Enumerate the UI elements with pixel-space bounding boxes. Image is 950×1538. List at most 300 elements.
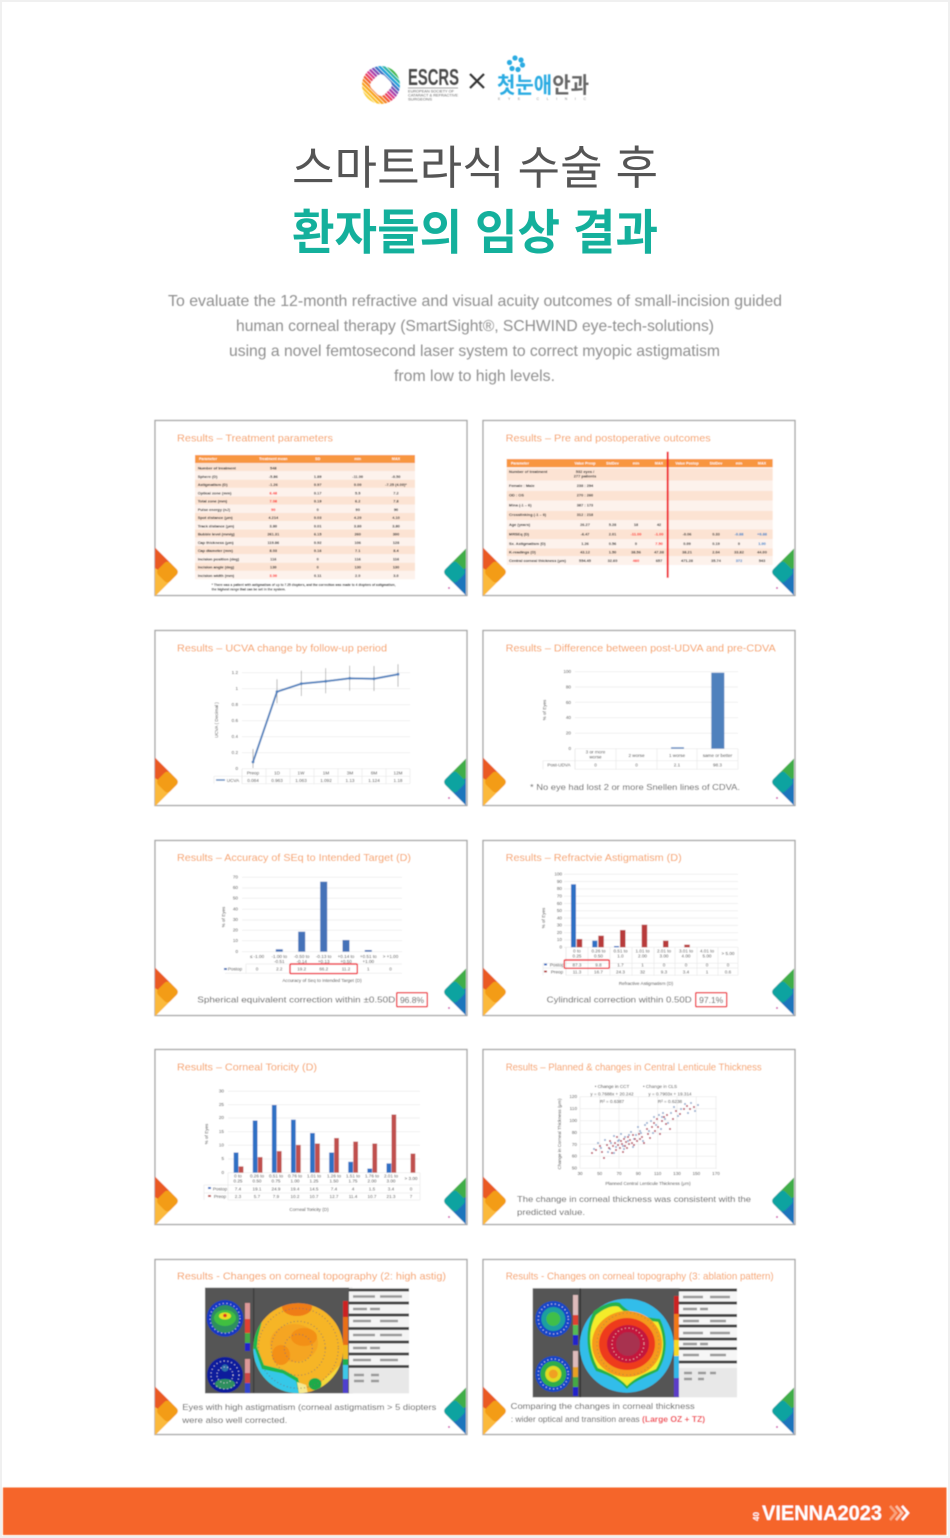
bar chart: 70 (233, 874, 238, 880)
table: SD (315, 457, 321, 461)
heading: Results – Corneal Toricity (D) (177, 1062, 317, 1074)
table: 7.1 (355, 548, 361, 553)
table: 6.48 (270, 490, 278, 495)
table: Cap thickness (μm) (198, 540, 234, 545)
table: 5.5 (355, 490, 361, 495)
table: Central corneal thickness (μm) (509, 558, 567, 563)
bar chart: > 3.00 (405, 1176, 418, 1181)
bar chart: 16.7 (594, 970, 603, 974)
line chart: 1.18 (394, 778, 403, 783)
callout: 96.8% (397, 993, 427, 1007)
table: 6.15 (314, 532, 322, 537)
table: 4.20 (354, 515, 361, 520)
table: -11.00 (352, 474, 363, 479)
table: 47.38 (654, 550, 665, 554)
bar chart: 0 (635, 763, 638, 768)
table: 119.86 (267, 540, 280, 545)
red divider line (667, 452, 669, 578)
bar chart: 12.7 (330, 1194, 339, 1199)
table: 3.80 (392, 523, 400, 528)
table: 3.80 (354, 523, 361, 528)
table: 5.28 (609, 522, 617, 527)
bar chart: 0.51 to (613, 948, 628, 954)
bar chart: 1.00 (291, 1178, 300, 1183)
table: 543 (759, 558, 766, 563)
table: Bubble level (mm/g) (198, 532, 235, 537)
bar chart: % of Eyes (541, 907, 546, 928)
table (507, 459, 773, 565)
table: 90 (271, 507, 275, 512)
table: 32.60 (608, 558, 617, 563)
bar chart: 1.0 (617, 953, 624, 958)
bar chart: 60 (566, 700, 571, 705)
table: Number of treatment (198, 466, 237, 470)
table: Age (years) (509, 522, 531, 527)
table: 8.03 (270, 548, 278, 553)
bar chart: 32 (640, 970, 645, 974)
line chart: 6M (371, 770, 377, 776)
table: 8.4 (393, 548, 400, 553)
table: -1.00 (655, 532, 663, 536)
line chart: 1.063 (295, 778, 307, 783)
panel: pre and postoperative outcomes (483, 420, 795, 596)
bar chart: 0 (235, 949, 238, 954)
data table (679, 1288, 737, 1397)
table: 1.50 (609, 550, 616, 554)
table: -0.88 (735, 532, 744, 536)
scatter plot: y = 0.7903x + 19.314 (648, 1092, 692, 1096)
table: -11.00 (631, 532, 641, 536)
table: Optical zone (mm) (198, 490, 232, 495)
bar chart: 1.01 to (635, 948, 650, 954)
colour scales (573, 1295, 679, 1397)
line chart: UCVA ( Decimal ) (214, 702, 219, 738)
caption: The change in corneal thickness was consistent with the (517, 1194, 751, 1204)
table: 0.09 (683, 541, 692, 546)
bar chart: 11.4 (349, 1194, 358, 1199)
bar chart: same or better (703, 753, 733, 758)
scatter plot: • Change in CLS (643, 1084, 677, 1089)
bar chart: 1.25 (310, 1178, 319, 1183)
bar chart: 2.00 (368, 1178, 377, 1183)
bar chart: Postop (228, 966, 243, 972)
table: 7.8 (393, 498, 400, 504)
bar chart: 7.4 (235, 1186, 242, 1192)
table: -0.06 (683, 532, 692, 536)
bar chart: Postop (213, 1186, 228, 1192)
bar chart: 3.4 (683, 970, 690, 974)
line chart: 0.4 (232, 734, 238, 739)
caption: : wider optical and transition areas (Large OZ + TZ) (511, 1414, 705, 1424)
bar chart: ≤ -1.00 (250, 954, 265, 959)
bar chart: 0 (389, 966, 392, 972)
table: 7.2 (393, 490, 400, 495)
table: Track distance (μm) (198, 523, 235, 528)
table: 0 (635, 541, 637, 546)
ESCRS wordmark: CATARACT & REFRACTIVE (408, 94, 458, 98)
bar chart: 2 worse (628, 753, 645, 758)
table: 277 patients (574, 474, 596, 478)
panel: central lenticule thickness (483, 1050, 795, 1224)
clinic name: 첫눈애안과 (497, 73, 589, 98)
table: 0 (317, 565, 319, 570)
table: 4.214 (268, 515, 279, 520)
line chart: 0.2 (232, 750, 238, 755)
caption: Comparing the changes in corneal thickness (511, 1401, 695, 1411)
line chart: 1.2 (232, 670, 238, 675)
line chart: 1M (323, 770, 329, 776)
table: 4.10 (392, 515, 400, 520)
bar chart: 0 (559, 944, 562, 950)
bar chart: 0.51 to (269, 1174, 283, 1178)
table: 532 eyes / (576, 469, 595, 474)
bar chart: 15 (219, 1129, 224, 1134)
table: MAX (655, 461, 664, 465)
heading: Results – Accuracy of SEq to Intended Target (D) (177, 852, 411, 864)
table: 0.03 (314, 515, 322, 520)
data table (349, 1288, 409, 1393)
line chart: 0.6 (232, 718, 238, 723)
scatter plot: 90 (636, 1171, 641, 1176)
table: 42 (657, 522, 662, 527)
table: -1.26 (269, 482, 279, 487)
table: 26.27 (580, 522, 590, 527)
scatter plot: y = 0.7688x + 20.242 (590, 1092, 634, 1096)
bar chart: 10 (557, 937, 562, 942)
table: min (354, 457, 362, 461)
bar chart: 40 (233, 906, 238, 912)
bar chart: 21.3 (387, 1194, 396, 1199)
bar chart: 60 (233, 885, 238, 890)
bar chart: 7.4 (331, 1186, 338, 1192)
scatter plot: Planned Central Lenticule Thickness (μm) (605, 1181, 691, 1186)
small map bottom (535, 1356, 571, 1392)
footnote: the highest range that can be set in the system. (212, 588, 286, 592)
line chart: 0.8 (232, 702, 238, 707)
footnote (212, 583, 396, 592)
table: 116 (355, 556, 362, 561)
bar chart: 4 (352, 1186, 355, 1192)
line chart: 1D (274, 770, 281, 776)
intro text block: human corneal therapy (SmartSight®, SCHWIND eye-tech-solutions) (236, 318, 714, 335)
scatter plot: 110 (570, 1106, 577, 1111)
table: 0 (317, 556, 319, 561)
table: 0.11 (314, 573, 322, 578)
bar chart: 0.25 (234, 1178, 243, 1183)
table: Value Preop (574, 461, 596, 465)
bar chart: 30 (219, 1088, 224, 1094)
highlight box (290, 964, 357, 974)
table: 387 : 173 (577, 502, 594, 508)
bar chart: worse (589, 754, 602, 760)
table: 38.56 (631, 550, 642, 554)
table: 116 (393, 556, 400, 561)
bar chart: Refractive Astigmatism (D) (619, 981, 674, 986)
small map top (535, 1301, 571, 1337)
bar chart: 5.7 (254, 1194, 261, 1199)
table: Parameter (199, 457, 218, 461)
bar chart: 2.3 (235, 1194, 242, 1199)
bar chart: 19.2 (297, 966, 307, 972)
bar chart: % of Eyes (221, 906, 226, 927)
caption: predicted value. (517, 1207, 585, 1217)
bar chart: 3.4 (388, 1186, 395, 1192)
bar chart: 5.00 (703, 953, 712, 958)
line chart: 1.092 (320, 778, 332, 783)
bar chart: 3 or more (586, 750, 606, 754)
scatter plot: 120 (569, 1094, 577, 1099)
logo: ESCRS and clinic (361, 54, 590, 105)
bar chart: 0.50 (594, 953, 603, 958)
bar chart: 9.8 (595, 963, 602, 968)
table: 33.82 (734, 550, 745, 554)
table: 261.31 (267, 532, 280, 537)
bar chart: 4.01 to (700, 948, 714, 954)
bar chart: 0 (221, 1170, 224, 1175)
panel: UCVA change (155, 630, 467, 806)
caption (511, 1401, 705, 1424)
bar chart: 0.26 to (250, 1174, 264, 1178)
bar chart: 10.2 (291, 1194, 300, 1199)
bar chart: 4.00 (682, 953, 691, 958)
bar chart: 3.00 (660, 953, 669, 958)
intro text block (168, 293, 782, 385)
bar chart: Accuracy of Seq to Intended Target (D) (282, 978, 362, 983)
bar chart: 0 (706, 963, 709, 968)
bar chart: 0 to (234, 1174, 242, 1178)
table: Female : Male (509, 483, 535, 488)
scatter plot: R² = 0.6238 (658, 1099, 683, 1104)
scatter plot: 30 (577, 1171, 583, 1176)
title (292, 142, 658, 260)
scatter plot: Change in Corneal Thickness (μm) (557, 1098, 562, 1170)
table: 90 (394, 507, 398, 512)
table: 0.01 (314, 523, 322, 528)
bar chart: 2.00 (638, 953, 647, 958)
bar chart: +0.51 to (360, 954, 377, 959)
bar chart: 0.26 to (591, 948, 606, 954)
bar chart: 1.50 (330, 1178, 339, 1183)
bar chart: 0 (256, 966, 259, 972)
scatter plot: 70 (616, 1171, 622, 1176)
scatter plot: 50 (572, 1166, 577, 1170)
table: 0.19 (314, 498, 322, 504)
bar chart: 0 (685, 963, 688, 968)
table: -0.50 (392, 474, 400, 479)
callout: 97.1% (696, 993, 727, 1007)
bar chart: 100 (554, 872, 562, 876)
footer band (3, 1488, 946, 1535)
heading: Results – Pre and postoperative outcomes (506, 432, 711, 444)
table: Mina (-1 – 6) (509, 502, 532, 508)
table: 38.21 (682, 550, 693, 554)
title: 환자들의 임상 결과 (292, 207, 658, 260)
line chart: 0 (235, 766, 238, 771)
panel: treatment parameters (155, 420, 467, 596)
table: Pulse energy (nJ) (198, 507, 231, 512)
intro text block: using a novel femtosecond laser system to correct myopic astigmatism (229, 343, 720, 360)
ESCRS wordmark: EUROPEAN SOCIETY OF (408, 90, 454, 94)
table (195, 455, 415, 579)
bar chart: 19.4 (291, 1186, 300, 1192)
table: 2.01 (609, 532, 617, 536)
bar chart: 0 (410, 1186, 413, 1192)
bar chart: +0.50 (340, 959, 352, 964)
table: 128 (393, 540, 400, 545)
table: 2.04 (712, 550, 721, 554)
icon: chevrons (890, 1506, 908, 1520)
table: 130 (393, 565, 399, 570)
table: 3.00 (270, 573, 277, 578)
small map top (207, 1300, 243, 1337)
table: Incision position (deg) (198, 556, 240, 561)
intro text block: from low to high levels. (394, 368, 555, 385)
icon: ESCRS ring (361, 65, 401, 105)
panel: topography high astig (155, 1260, 467, 1434)
bar chart: 40 (557, 916, 562, 920)
bar chart: 1 (641, 963, 644, 968)
bar chart: 20 (233, 928, 238, 932)
table: +0.88 (757, 532, 768, 536)
bar chart: 30 (557, 922, 562, 928)
table: 3.0 (393, 573, 399, 578)
table: 44.00 (757, 550, 767, 554)
scatter plot: R² = 0.6387 (600, 1099, 625, 1104)
bar chart: -0.13 to (316, 954, 332, 959)
ESCRS wordmark: ESCRS (408, 64, 459, 90)
bar chart: 60 (557, 901, 562, 906)
caption: Eyes with high astigmatism (corneal astigmatism > 5 diopters (182, 1402, 436, 1412)
bar chart: 30 (233, 917, 238, 922)
caption: Cylindrical correction within 0.50D (547, 995, 692, 1005)
line chart: 0.084 (247, 778, 259, 783)
table: Spot distance (μm) (198, 515, 233, 520)
40th mark: 40 (752, 1512, 761, 1521)
table: 90 (356, 507, 360, 512)
scatter plot: 50 (597, 1171, 603, 1176)
line chart: Preop (247, 770, 260, 776)
bar chart: 24.3 (616, 970, 625, 974)
table: -5.86 (269, 474, 279, 479)
bar chart: 1.75 (349, 1178, 358, 1183)
bar chart: Preop (214, 1194, 227, 1199)
bar chart: 3.00 (387, 1178, 396, 1183)
bar chart: 20 (557, 930, 562, 935)
table: 1.89 (314, 474, 322, 479)
small map bottom (207, 1357, 243, 1393)
table: MAX (392, 457, 401, 461)
bar chart: 50 (557, 908, 562, 913)
table: Incision width (mm) (198, 573, 235, 578)
panel: corneal toricity (155, 1050, 467, 1224)
table: Treatment mean (259, 457, 288, 461)
scatter plot: 170 (712, 1171, 720, 1176)
table: 260 (354, 532, 361, 537)
heading: Results – Planned & changes in Central Lenticule Thickness (506, 1062, 762, 1074)
table: Parameter (511, 461, 530, 465)
bar chart: 2.01 to (657, 948, 671, 954)
scatter plot: 80 (572, 1130, 577, 1135)
table: 1.00 (758, 541, 766, 546)
table: 548 (270, 466, 277, 470)
bar chart: 14.5 (310, 1186, 319, 1192)
bar chart: Postop (550, 963, 565, 968)
bar chart: 0.25 (573, 953, 582, 958)
panel: refractive astigmatism (483, 840, 795, 1016)
table: 0.17 (314, 490, 321, 495)
panel: accuracy of SEq (155, 840, 467, 1016)
table: 270 : 260 (577, 492, 593, 498)
bar chart: 10.7 (368, 1194, 377, 1199)
bar chart: 0.50 (253, 1178, 262, 1183)
bar chart: 1 worse (669, 753, 685, 758)
bar chart: 0 (568, 746, 571, 751)
table: 2.0 (355, 573, 360, 578)
bar chart: 90 (557, 879, 562, 884)
caption: Spherical equivalent correction within ±0.50D (197, 995, 395, 1005)
table: Incision angle (deg) (198, 565, 235, 570)
bar chart: -1.00 to (272, 954, 288, 959)
bar chart (221, 874, 402, 983)
topography image (533, 1288, 737, 1397)
table: -7.25 (4.00)* (385, 482, 407, 487)
bar chart: % of Eyes (204, 1123, 209, 1144)
bar chart: 1.01 to (307, 1174, 321, 1178)
bar chart: > 5.00 (722, 951, 735, 956)
cross symbol (470, 74, 484, 88)
bar chart: 40 (566, 715, 571, 720)
bar chart: 10 (233, 938, 238, 943)
table: 6.2 (355, 498, 361, 504)
title: 스마트라식 수술 후 (292, 142, 658, 194)
VIENNA 2023: VIENNA2023 (762, 1502, 882, 1525)
table: 300 (393, 532, 399, 537)
table: Sx. Astigmatism (D) (509, 541, 546, 546)
table: min (736, 461, 743, 465)
line chart: 12M (394, 770, 403, 776)
bar chart (204, 1088, 420, 1212)
bar chart: +0.13 (318, 959, 330, 964)
table: Sphere (D) (198, 474, 218, 479)
bar chart: 70 (557, 894, 562, 898)
callout: 96.8%: 96.8% (400, 995, 424, 1005)
topography image (205, 1288, 409, 1399)
bar chart: 87.3 (573, 963, 582, 968)
table: 35.74 (711, 558, 722, 563)
table: 554.45 (579, 558, 592, 563)
table: 0.19 (712, 541, 721, 546)
footnote: * There was a patient with astigmatism of up to 7.25 diopters, and the correction was made to 4 diopters of astigmatism, (212, 583, 396, 587)
bar chart: -0.50 to (294, 954, 310, 959)
bar chart: 1.51 to (346, 1174, 360, 1178)
bar chart: > +1.00 (383, 954, 399, 959)
table: StdDev (606, 461, 620, 465)
bar chart: 2.01 to (384, 1174, 398, 1178)
table: Value Postop (675, 461, 699, 465)
scatter plot: • Change in CCT (595, 1084, 629, 1089)
table: MRSEq (D) (509, 532, 530, 536)
panel: post-UDVA vs pre-CDVA (483, 630, 795, 806)
heading: Results - Changes on corneal topography (3: ablation pattern) (506, 1270, 774, 1282)
table: min (633, 461, 640, 465)
scatter plot: 100 (569, 1118, 577, 1123)
table: 7.50 (655, 541, 663, 546)
table: 43.12 (580, 550, 591, 554)
bar chart: 2.1 (674, 763, 681, 768)
colour scales (245, 1301, 348, 1393)
bar chart: 80 (557, 886, 562, 891)
clinic subtitle: EYE CLINIC (498, 97, 586, 101)
